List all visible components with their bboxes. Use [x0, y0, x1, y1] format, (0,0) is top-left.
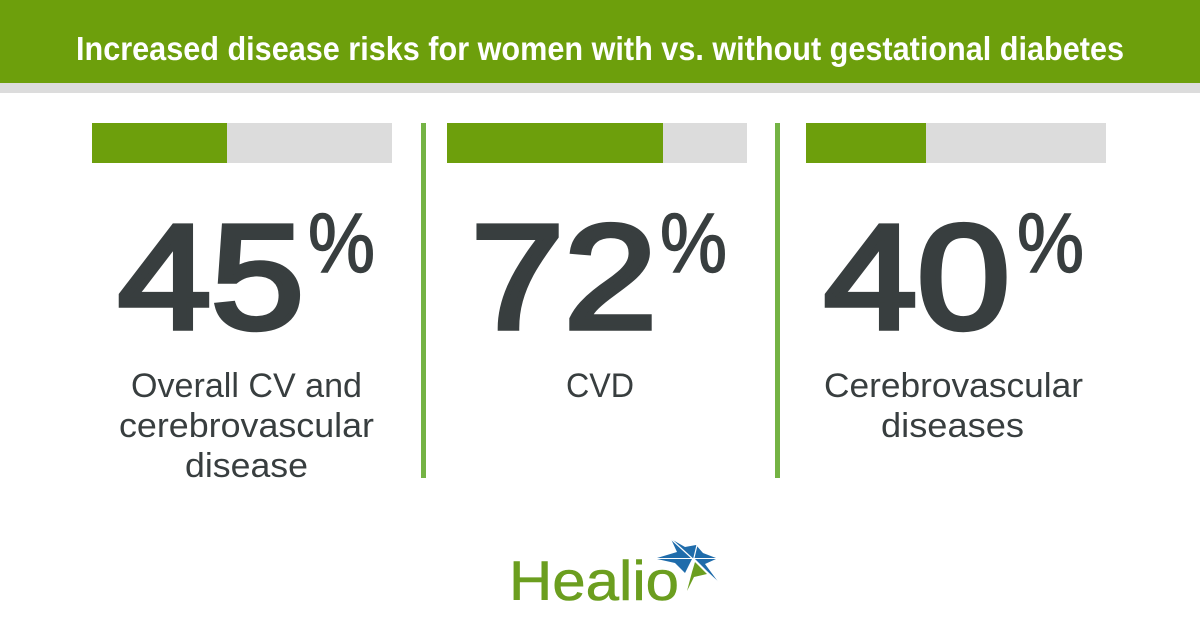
panel: cerebrovascular diseases — [806, 123, 1106, 445]
divider left — [421, 123, 426, 478]
statistic: 72% — [471, 195, 727, 360]
icon: star — [657, 539, 719, 591]
progress bar: 40% — [806, 123, 1106, 163]
statistic: 45%: % — [308, 196, 375, 290]
panel: overall CV and cerebrovascular disease — [92, 123, 392, 485]
divider right — [775, 123, 780, 478]
label: cerebrovascular diseases: diseases — [881, 407, 1024, 445]
logo wordmark: Healio — [509, 549, 679, 612]
label: overall CV and cerebrovascular disease: Overall CV and — [131, 367, 362, 405]
statistic: 72%: % — [660, 196, 727, 290]
label: overall CV and cerebrovascular disease: cerebrovascular — [119, 407, 374, 445]
panel: CVD — [447, 123, 747, 405]
statistic: 45% — [118, 195, 375, 360]
statistic: 40%: 40 — [824, 195, 1010, 360]
label: overall CV and cerebrovascular disease: disease — [185, 447, 308, 485]
statistic: 40%: % — [1017, 196, 1084, 290]
title: Increased disease risks for women with vs. without gestational diabetes — [76, 30, 1124, 67]
statistic: 45%: 45 — [118, 195, 304, 360]
label: CVD: CVD — [566, 367, 634, 405]
logo: Healio — [509, 539, 719, 612]
statistic: 72%: 72 — [471, 195, 657, 360]
progress bar: 72% — [447, 123, 747, 163]
label: cerebrovascular diseases: Cerebrovascular — [824, 367, 1083, 405]
label: overall CV and cerebrovascular disease — [119, 367, 374, 485]
progress bar: 45% — [92, 123, 392, 163]
label: cerebrovascular diseases — [824, 367, 1083, 445]
header banner — [0, 0, 1200, 93]
statistic: 40% — [824, 195, 1084, 360]
